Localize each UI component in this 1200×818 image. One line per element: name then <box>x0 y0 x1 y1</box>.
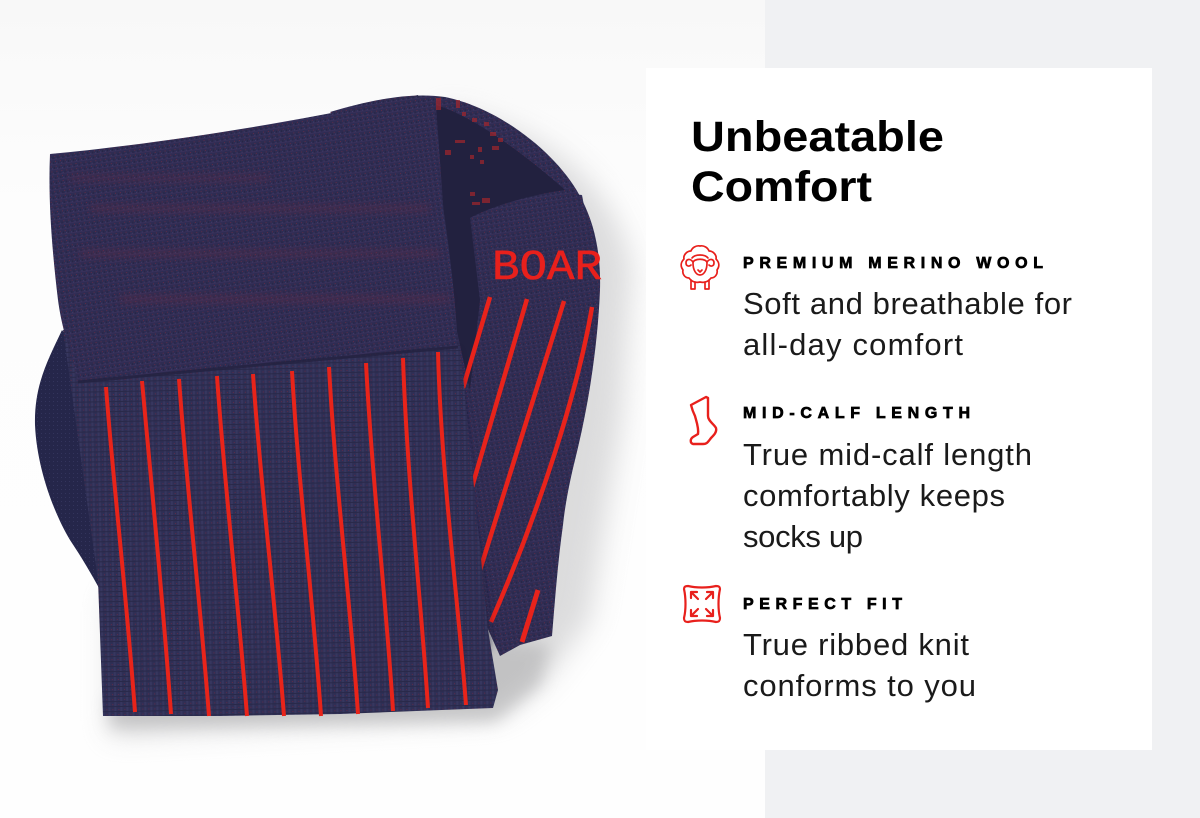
text: conforms to you <box>743 668 976 703</box>
icon: sheep <box>681 246 719 289</box>
label: PERFECT FIT <box>743 596 902 613</box>
sock: left fold <box>35 330 120 590</box>
label: MID-CALF LENGTH <box>743 405 970 422</box>
text: True mid-calf length <box>743 437 1032 472</box>
sock: heel and back <box>330 95 602 656</box>
sock: front ribbed panel <box>63 300 498 716</box>
text: True ribbed knit <box>743 627 969 662</box>
heel dots <box>436 98 503 205</box>
title: Comfort <box>691 163 872 211</box>
text <box>743 627 976 703</box>
text: comfortably keeps <box>743 478 1005 513</box>
back stripes <box>463 297 592 642</box>
text: socks up <box>743 519 863 554</box>
sock: folded cuff <box>49 95 458 382</box>
text: Soft and breathable for <box>743 286 1072 321</box>
title: Unbeatable <box>691 113 944 161</box>
fold shadow <box>455 345 492 650</box>
text <box>743 286 1072 362</box>
icon: sock outline <box>691 397 716 444</box>
label: PREMIUM MERINO WOOL <box>743 255 1043 272</box>
text <box>743 437 1032 554</box>
front stripes <box>106 352 466 716</box>
photo: folded navy sock with red stripes <box>35 95 602 716</box>
feature: mid-calf length <box>691 397 1032 554</box>
panel: features <box>646 68 1152 750</box>
sock shadow <box>108 110 632 735</box>
sock logo text: BOAR <box>492 243 602 292</box>
icon: stretch arrows <box>684 586 720 622</box>
title <box>691 113 944 211</box>
feature: perfect fit <box>684 586 976 703</box>
text: all-day comfort <box>743 327 963 362</box>
feature: merino wool <box>681 246 1072 362</box>
